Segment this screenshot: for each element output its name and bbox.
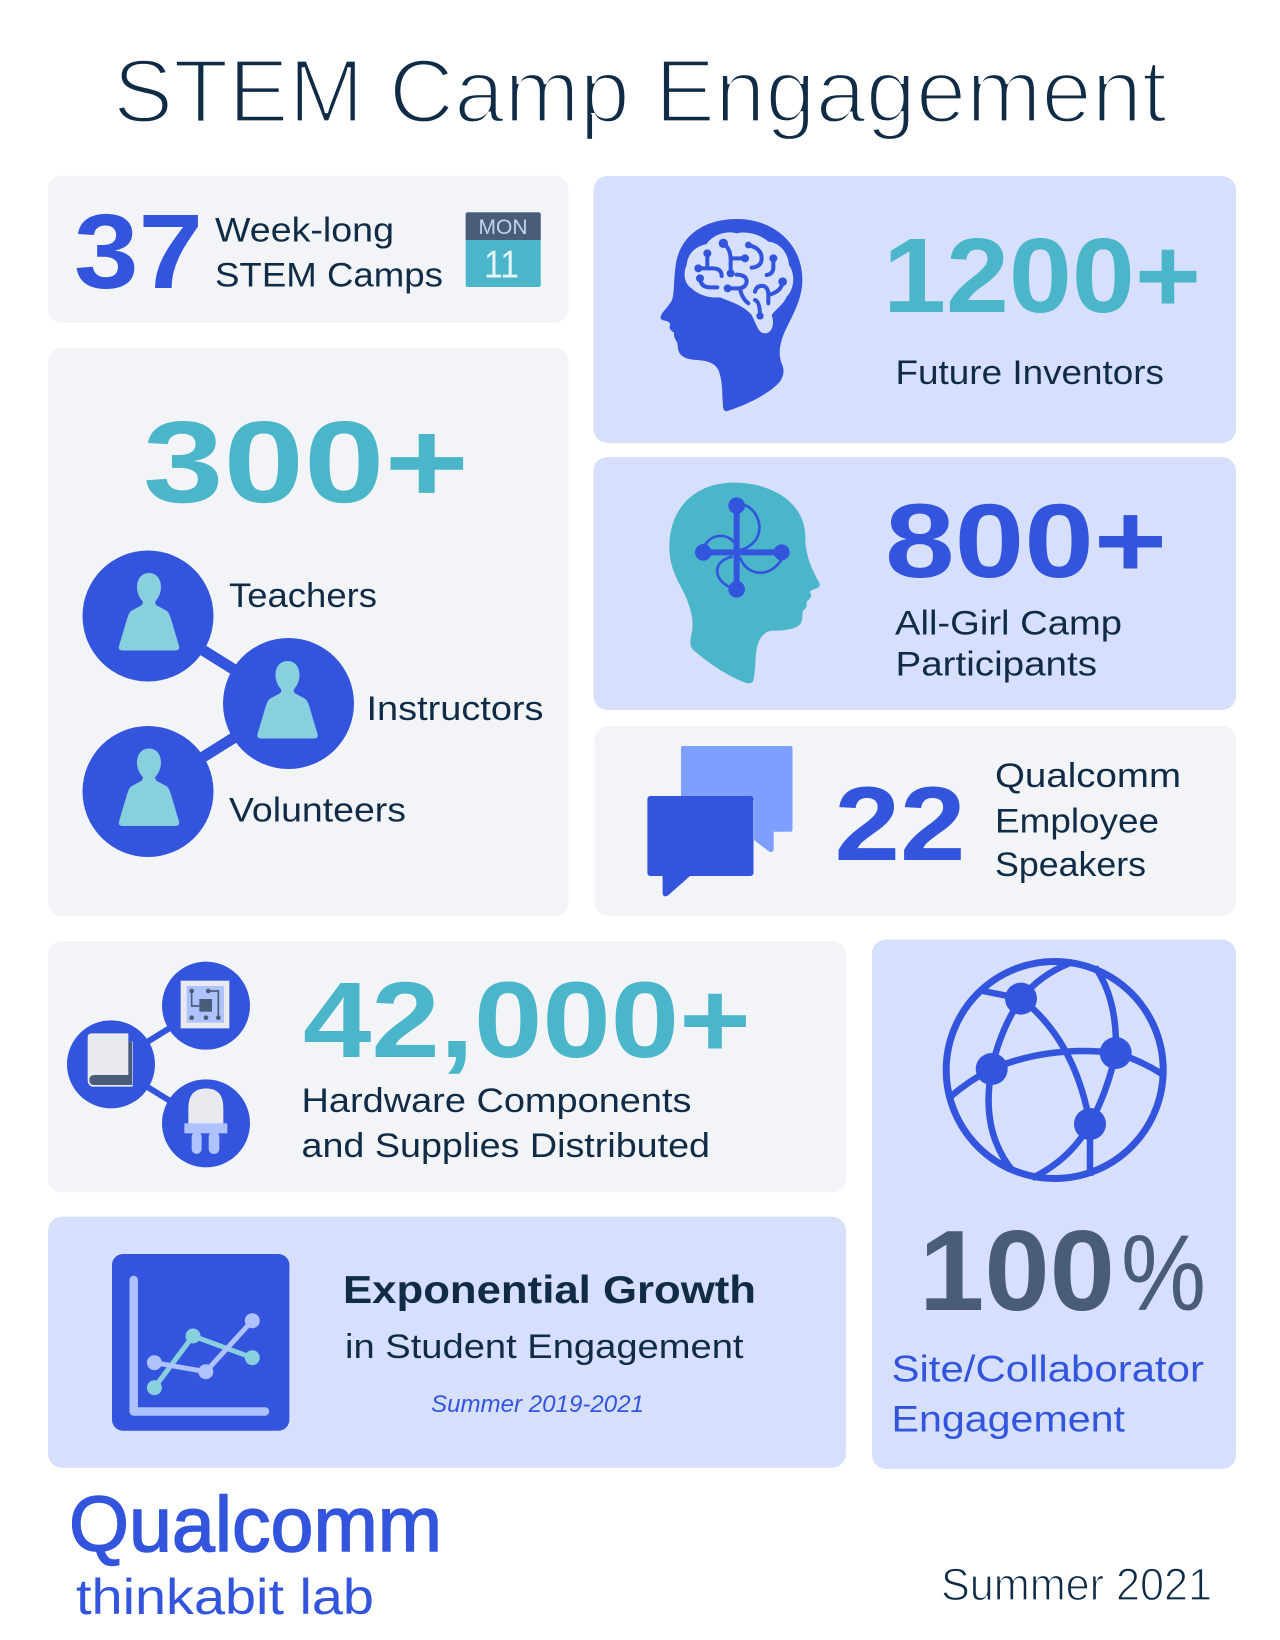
stat: 1200+: 1200+ bbox=[883, 217, 1201, 335]
panel: 100% collaborator engagement bbox=[872, 940, 1236, 1469]
icon: calendar bbox=[466, 212, 541, 287]
label: site/collaborator engagement: Site/Collaborator bbox=[892, 1348, 1204, 1390]
text: week-long stem camps bbox=[215, 212, 443, 294]
panel: 22 employee speakers bbox=[594, 726, 1236, 916]
label: instructors: Instructors bbox=[366, 690, 544, 728]
label: all-girl camp participants: Participants bbox=[896, 646, 1097, 684]
label: qualcomm employee speakers: Employee bbox=[995, 802, 1159, 840]
title: STEM Camp Engagement bbox=[113, 42, 1167, 142]
label: volunteers: Volunteers bbox=[229, 792, 406, 830]
label: qualcomm employee speakers bbox=[995, 757, 1181, 884]
text: week-long stem camps: Week-long bbox=[215, 212, 394, 250]
footer date: Summer 2021 bbox=[941, 1559, 1212, 1610]
panel: 37 week-long camps bbox=[48, 176, 568, 323]
stat: 42,000+: 42,000+ bbox=[303, 959, 751, 1080]
icon: speech bubbles bbox=[647, 746, 792, 896]
label: qualcomm employee speakers: Qualcomm bbox=[995, 757, 1181, 795]
heading: exponential growth: Exponential Growth bbox=[343, 1269, 756, 1312]
label: teachers: Teachers bbox=[229, 577, 377, 615]
label: qualcomm employee speakers: Speakers bbox=[995, 846, 1146, 884]
stat: 800+: 800+ bbox=[885, 483, 1167, 600]
stat: 37: 37 bbox=[74, 193, 203, 311]
logo: qualcomm thinkabit lab: Qualcomm bbox=[69, 1480, 442, 1568]
logo: qualcomm thinkabit lab: thinkabit lab bbox=[76, 1569, 374, 1625]
label: site/collaborator engagement: Engagement bbox=[892, 1398, 1126, 1440]
text: week-long stem camps: STEM Camps bbox=[215, 256, 443, 294]
label: hardware components and supplies distributed: Hardware Components bbox=[302, 1082, 692, 1120]
icon: line chart bbox=[112, 1254, 289, 1431]
icon: volunteer person bbox=[82, 726, 214, 857]
icon: instructor person bbox=[223, 638, 354, 769]
stat: 100% bbox=[919, 1208, 1206, 1335]
icon: calendar: 11 bbox=[484, 244, 519, 287]
stat: 300+: 300+ bbox=[143, 397, 469, 527]
label: future inventors: Future Inventors bbox=[896, 354, 1164, 392]
text: summer 2019-2021: Summer 2019-2021 bbox=[431, 1391, 644, 1418]
panel: 1200+ future inventors bbox=[594, 176, 1236, 443]
panel: 42,000+ hardware bbox=[48, 941, 846, 1192]
icon: head with network bbox=[669, 483, 820, 683]
label: all-girl camp participants: All-Girl Camp bbox=[895, 604, 1122, 642]
icon: globe network bbox=[946, 962, 1163, 1178]
stat: 100%: % bbox=[1121, 1212, 1206, 1333]
label: all-girl camp participants bbox=[895, 604, 1122, 684]
stat: 22: 22 bbox=[834, 766, 966, 883]
icon: teacher person bbox=[82, 550, 214, 682]
label: hardware components and supplies distributed: and Supplies Distributed bbox=[302, 1127, 710, 1165]
icon: hardware network bbox=[67, 962, 250, 1167]
label: hardware components and supplies distributed bbox=[302, 1082, 710, 1165]
panel: 300+ people bbox=[48, 348, 568, 916]
network connectors bbox=[148, 616, 288, 792]
panel: exponential growth bbox=[48, 1217, 846, 1468]
logo: qualcomm thinkabit lab bbox=[69, 1480, 442, 1625]
label: site/collaborator engagement bbox=[892, 1348, 1204, 1440]
text: in student engagement: in Student Engagement bbox=[345, 1328, 744, 1366]
icon: head with circuit brain bbox=[661, 219, 802, 411]
icon: calendar: MON bbox=[478, 216, 528, 239]
stat: 100%: 100 bbox=[919, 1208, 1115, 1335]
panel: 800+ all-girl camp bbox=[594, 457, 1236, 710]
